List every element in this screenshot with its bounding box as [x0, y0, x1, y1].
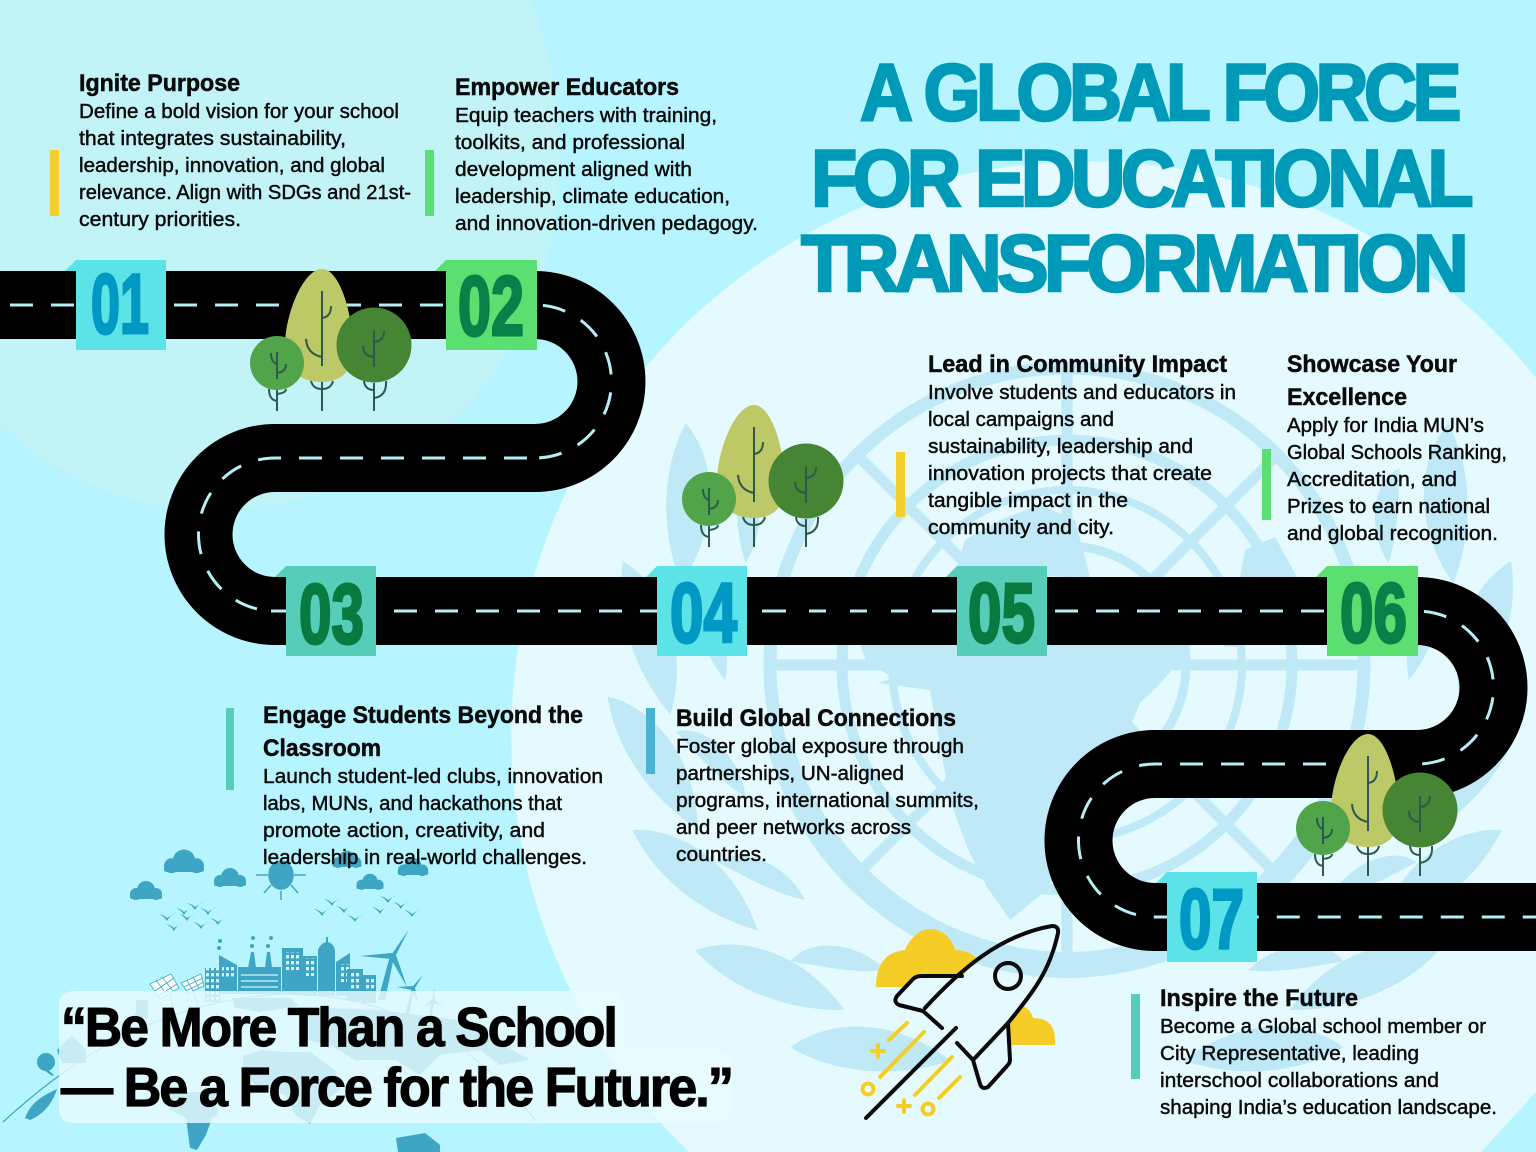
icon: yellow clouds	[876, 929, 1055, 1045]
body text: countries.	[676, 843, 767, 866]
body text: Foster global exposure through	[676, 735, 964, 758]
rocket body	[866, 926, 1058, 1118]
heading: Showcase Your	[1287, 351, 1457, 378]
body text: and innovation-driven pedagogy.	[455, 212, 758, 235]
accent bar	[50, 150, 59, 216]
step 03 tile: 03	[299, 567, 364, 661]
icon: birds	[159, 895, 421, 931]
accent bar	[1131, 994, 1140, 1079]
title: FOR EDUCATIONAL	[811, 134, 1471, 224]
body text: leadership, climate education,	[455, 185, 730, 208]
body text: partnerships, UN-aligned	[676, 762, 904, 785]
globe arc	[3, 994, 536, 1122]
body text: Apply for India MUN’s	[1287, 414, 1484, 437]
heading: Classroom	[263, 735, 381, 762]
title: A GLOBAL FORCE	[860, 48, 1459, 138]
body text: Define a bold vision for your school	[79, 100, 399, 123]
card: Build Global Connections	[646, 705, 979, 866]
body text: relevance. Align with SDGs and 21st-	[79, 181, 411, 204]
heading: Lead in Community Impact	[928, 351, 1227, 378]
body text: development aligned with	[455, 158, 692, 181]
top-left pale blob	[0, 0, 559, 510]
body text: programs, international summits,	[676, 789, 979, 812]
body text	[1160, 1015, 1497, 1119]
icon: solar panels	[150, 974, 204, 1020]
body text	[263, 765, 603, 869]
heading	[263, 702, 583, 762]
trees: group 2	[682, 405, 844, 547]
body text: innovation projects that create	[928, 462, 1212, 485]
quote	[61, 996, 732, 1118]
body text	[1287, 414, 1507, 545]
road	[0, 305, 1536, 917]
step 03 tile	[275, 566, 376, 661]
step 01 tile	[65, 257, 166, 351]
body text: shaping India’s education landscape.	[1160, 1096, 1497, 1119]
body text: leadership in real-world challenges.	[263, 846, 587, 869]
accent bar	[646, 708, 655, 774]
heading: Excellence	[1287, 384, 1407, 411]
step 05 tile: 05	[968, 566, 1035, 660]
exhaust marks	[862, 1023, 960, 1114]
UN emblem watermark	[603, 368, 1531, 1098]
heading: Inspire the Future	[1160, 985, 1358, 1012]
body text: and peer networks across	[676, 816, 911, 839]
step 01 tile: 01	[91, 257, 149, 351]
step 04 tile	[646, 566, 747, 660]
globe continents	[25, 998, 530, 1152]
card: Empower Educators	[425, 74, 758, 235]
body text: interschool collaborations and	[1160, 1069, 1439, 1092]
step 07 tile	[1156, 872, 1257, 966]
icon: wind turbines	[360, 929, 444, 1025]
body text: Global Schools Ranking,	[1287, 441, 1507, 464]
card: Ignite Purpose	[50, 70, 411, 231]
body text: Involve students and educators in	[928, 381, 1236, 404]
step 02 tile	[435, 259, 537, 353]
heading: Ignite Purpose	[79, 70, 240, 97]
body text: local campaigns and	[928, 408, 1114, 431]
body text: Become a Global school member or	[1160, 1015, 1486, 1038]
globe rings and grid	[770, 368, 1364, 965]
body text: community and city.	[928, 516, 1114, 539]
card: Lead in Community Impact	[896, 351, 1236, 539]
quote: — Be a Force for the Future.”	[61, 1056, 732, 1118]
card: Inspire the Future	[1131, 985, 1497, 1119]
accent bar	[425, 150, 434, 216]
body text: century priorities.	[79, 208, 241, 231]
trees: group 1	[250, 269, 412, 411]
body text: toolkits, and professional	[455, 131, 685, 154]
body text	[676, 735, 979, 866]
body text: labs, MUNs, and hackathons that	[263, 792, 562, 815]
card: Engage Students Beyond the Classroom	[226, 702, 603, 869]
body text: Accreditation, and	[1287, 468, 1457, 491]
body text: and global recognition.	[1287, 522, 1498, 545]
body text	[79, 100, 411, 231]
olive wreath	[603, 422, 1531, 1098]
step 06 tile	[1316, 566, 1418, 660]
body text: Launch student-led clubs, innovation	[263, 765, 603, 788]
body text: promote action, creativity, and	[263, 819, 545, 842]
body text: sustainability, leadership and	[928, 435, 1193, 458]
city skyline	[205, 936, 376, 1003]
accent bar	[896, 452, 905, 517]
heading	[1287, 351, 1457, 411]
body text: City Representative, leading	[1160, 1042, 1419, 1065]
body text: Prizes to earn national	[1287, 495, 1490, 518]
body text	[455, 104, 758, 235]
heading: Engage Students Beyond the	[263, 702, 583, 729]
eco world illustration	[3, 850, 536, 1152]
large pale circle	[511, 161, 1536, 1152]
step 07 tile: 07	[1179, 872, 1244, 966]
heading: Build Global Connections	[676, 705, 956, 732]
body text	[928, 381, 1236, 539]
globe land	[860, 505, 1297, 920]
accent bar	[1262, 449, 1271, 520]
heading: Empower Educators	[455, 74, 679, 101]
step 06 tile: 06	[1340, 566, 1407, 660]
body text: that integrates sustainability,	[79, 127, 346, 150]
step 05 tile	[946, 566, 1047, 660]
title: TRANSFORMATION	[801, 219, 1464, 309]
quote background	[59, 991, 731, 1123]
icon: sun	[256, 861, 306, 900]
accent bar	[226, 708, 234, 790]
body text: Equip teachers with training,	[455, 104, 717, 127]
icon: rocket with clouds	[862, 926, 1058, 1118]
body text: tangible impact in the	[928, 489, 1128, 512]
quote: “Be More Than a School	[61, 996, 616, 1058]
title	[801, 48, 1471, 309]
card: Showcase Your Excellence	[1262, 351, 1507, 545]
trees: group 3	[1296, 734, 1458, 876]
step 04 tile: 04	[670, 566, 737, 660]
step 02 tile: 02	[458, 259, 524, 353]
body text: leadership, innovation, and global	[79, 154, 385, 177]
icon: clouds	[130, 850, 428, 900]
